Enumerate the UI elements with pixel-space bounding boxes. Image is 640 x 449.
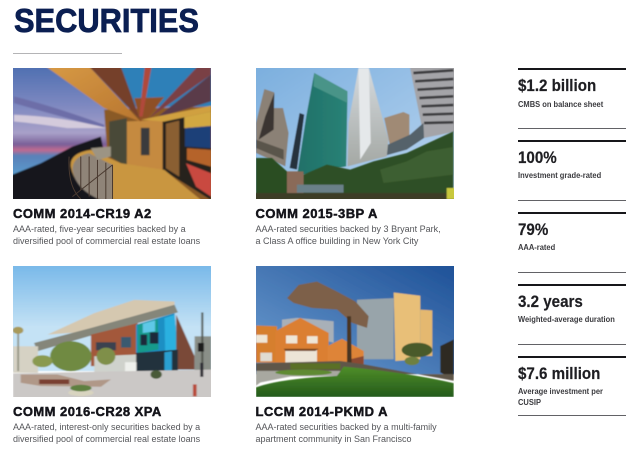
label: Investment grade-rated: [518, 170, 601, 180]
description: [256, 422, 437, 444]
stat: investment grade: [518, 140, 626, 201]
heading: LCCM 2014-PKMD A: LCCM 2014-PKMD A: [256, 404, 388, 419]
heading: COMM 2015-3BP A: COMM 2015-3BP A: [256, 206, 378, 221]
stat: average investment per CUSIP: [518, 356, 626, 416]
label: CMBS on balance sheet: [518, 100, 603, 108]
park trees: [253, 131, 456, 201]
value: 100%: [518, 148, 557, 166]
description: [13, 224, 200, 246]
photo: Bryant Park towers: [256, 68, 454, 199]
description: diversified pool of commercial real estate loans: [13, 236, 200, 246]
description: [256, 224, 441, 246]
description: diversified pool of commercial real estate loans: [13, 434, 200, 444]
panel: COMM 2015-3BP A: [256, 68, 454, 246]
heading: COMM 2014-CR19 A2: COMM 2014-CR19 A2: [13, 206, 152, 221]
title underline: [13, 53, 122, 54]
panel: COMM 2016-CR28 XPA: [13, 266, 211, 444]
description: a Class A office building in New York City: [256, 236, 418, 246]
label: AAA-rated: [518, 242, 555, 252]
value: $7.6 million: [518, 364, 600, 382]
panel: COMM 2014-CR19 A2: [13, 68, 211, 246]
value: 79%: [518, 220, 548, 238]
photo: apartment community with lawn and tree: [256, 266, 454, 397]
value: 3.2 years: [518, 292, 583, 310]
label: Weighted-average duration: [518, 314, 615, 324]
stat: CMBS on balance sheet: [518, 68, 626, 129]
description: AAA-rated, interest-only securities backed by a: [13, 422, 200, 432]
photo: retail building on a plaza: [13, 266, 211, 397]
description: AAA-rated securities backed by 3 Bryant Park,: [256, 224, 441, 234]
label: Average investment per: [518, 386, 603, 396]
panel: LCCM 2014-PKMD A: [256, 266, 454, 444]
label: CUSIP: [518, 398, 541, 406]
description: AAA-rated, five-year securities backed by a: [13, 224, 186, 234]
photo: clifftop house at dusk: [13, 68, 211, 199]
balcony railing: [69, 157, 113, 199]
label: [518, 386, 603, 406]
title: SECURITIES: [14, 3, 199, 40]
description: [13, 422, 200, 444]
value: $1.2 billion: [518, 76, 596, 95]
stat: weighted-average duration: [518, 284, 626, 345]
description: AAA-rated securities backed by a multi-family: [256, 422, 437, 432]
stat: AAA-rated: [518, 212, 626, 273]
description: apartment community in San Francisco: [256, 434, 412, 444]
heading: COMM 2016-CR28 XPA: COMM 2016-CR28 XPA: [13, 404, 162, 419]
